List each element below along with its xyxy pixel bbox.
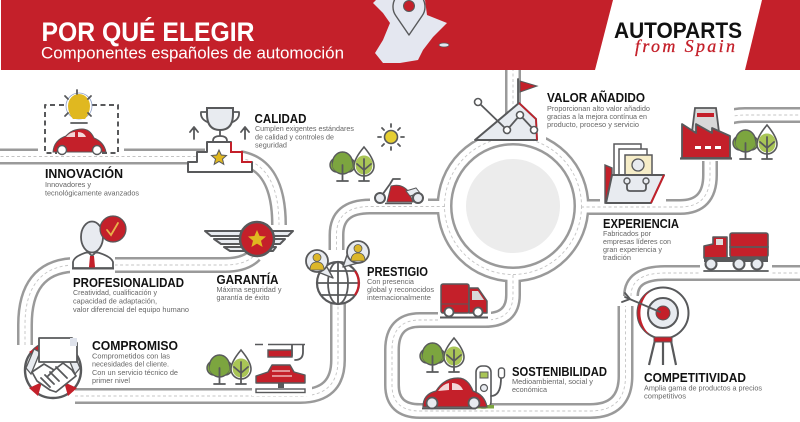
title: POR QUÉ ELEGIR — [42, 17, 254, 47]
icon: target with arrow — [622, 288, 688, 365]
description: Creatividad, cualificación y — [73, 288, 157, 297]
panel: compromiso — [25, 338, 178, 398]
description — [216, 285, 282, 302]
icon: van — [438, 281, 491, 321]
icon: professional with check — [70, 216, 126, 275]
heading: PRESTIGIO — [367, 264, 428, 279]
description — [512, 377, 593, 394]
description — [255, 124, 354, 150]
description: Cumplen exigentes estándares — [255, 124, 354, 133]
icon: handshake and contract — [25, 338, 81, 398]
heading: COMPETITIVIDAD — [644, 370, 746, 385]
description: primer nivel — [92, 376, 130, 385]
heading: COMPROMISO — [92, 338, 178, 353]
description: producto, proceso y servicio — [547, 120, 639, 129]
heading: VALOR AÑADIDO — [547, 90, 645, 105]
icon: electric car and charger — [422, 366, 504, 408]
description: Innovadores y — [45, 180, 91, 189]
icon: globe with people — [306, 241, 369, 304]
description: Con un servicio técnico de — [92, 368, 178, 377]
icon: trees — [733, 125, 777, 159]
icon: folder with documents — [600, 140, 666, 206]
description: gran experiencia y — [603, 245, 662, 254]
description: de calidad y controles de — [255, 132, 334, 142]
map of Spain — [373, 0, 449, 63]
panel: experiencia — [603, 216, 772, 275]
logo panel — [595, 0, 762, 70]
description: Proporcionan alto valor añadido — [547, 104, 650, 113]
description — [603, 229, 671, 262]
description — [92, 352, 178, 385]
description: Fabricados por — [603, 229, 652, 238]
heading: INNOVACIÓN — [45, 166, 123, 181]
heading: EXPERIENCIA — [603, 216, 680, 231]
icon: trees — [207, 350, 251, 384]
description — [45, 180, 139, 198]
roundabout centre — [466, 159, 560, 253]
description: Medioambiental, social y — [512, 377, 593, 386]
logo — [614, 18, 742, 56]
description: competitivos — [644, 392, 686, 400]
panel: profesionalidad — [70, 216, 189, 314]
panel: competitividad — [622, 288, 762, 400]
description — [73, 288, 189, 314]
icon: trees — [330, 147, 374, 181]
description: Máxima seguridad y — [216, 285, 282, 294]
description: económica — [512, 385, 548, 394]
description: capacidad de adaptación, — [73, 296, 157, 306]
panel: sostenibilidad — [420, 338, 607, 408]
heading: PROFESIONALIDAD — [73, 275, 184, 290]
description: garantía de éxito — [216, 293, 270, 302]
description — [547, 104, 650, 129]
description: Comprometidos con las — [92, 352, 170, 360]
heading: GARANTÍA — [216, 272, 279, 287]
panel: prestigio — [306, 241, 434, 304]
logo: from Spain — [635, 36, 735, 56]
heading: SOSTENIBILIDAD — [512, 364, 607, 379]
icon: mountain with flag — [470, 79, 546, 141]
panel: valor añadido — [470, 79, 650, 141]
description: valor diferencial del equipo humano — [73, 305, 189, 314]
heading: CALIDAD — [254, 111, 306, 126]
panel: innovación — [38, 90, 139, 198]
icon: truck — [700, 230, 772, 275]
description — [644, 384, 762, 400]
description: Con presencia — [367, 277, 415, 286]
panel: garantía — [205, 222, 293, 302]
icon: trees — [420, 338, 464, 372]
description: global y reconocidos — [367, 285, 434, 294]
panel: calidad — [188, 108, 354, 172]
description: empresas líderes con — [603, 237, 671, 246]
description: gracias a la mejora contínua en — [547, 112, 647, 121]
description: internacionalmente — [367, 293, 431, 302]
description: tecnológicamente avanzados — [45, 188, 139, 198]
icon: car on assembly line — [252, 342, 312, 396]
icon: sun — [378, 124, 404, 150]
description — [367, 277, 434, 302]
description: necesidades del cliente. — [92, 360, 169, 368]
icon: factory — [678, 105, 734, 161]
description: Amplia gama de productos a precios — [644, 384, 762, 392]
description: seguridad — [255, 140, 287, 150]
header banner — [1, 0, 800, 70]
icon: motorbike — [370, 176, 428, 204]
icon: trophy on podium — [188, 108, 252, 172]
subtitle: Componentes españoles de automoción — [41, 44, 344, 62]
logo: AUTOPARTS — [614, 18, 742, 43]
description: tradición — [603, 253, 631, 262]
icon: lightbulb and car — [38, 90, 124, 155]
icon: winged star badge — [205, 222, 293, 256]
